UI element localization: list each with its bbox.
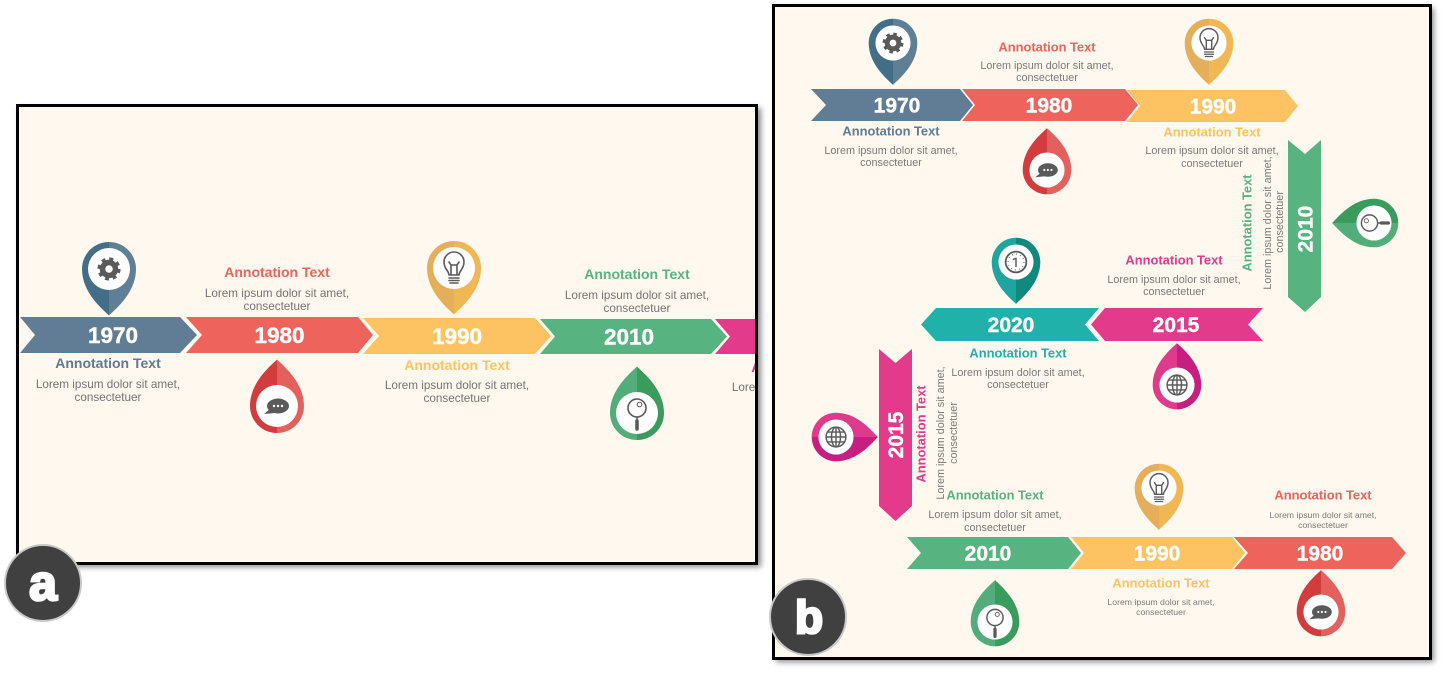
arrow 2015 <box>1091 308 1263 341</box>
annotation 1970: Annotation Text <box>842 124 940 138</box>
year 2020: 2020 <box>988 314 1034 337</box>
year 1990: 1990 <box>432 324 482 349</box>
year 2015: 2015 <box>885 411 908 458</box>
step 2010 <box>540 266 727 440</box>
annotation 2015: Lorem ipsum dolor sit amet, <box>732 381 876 394</box>
annotation 1980: Annotation Text <box>998 40 1096 54</box>
annotation 1990: Annotation Text <box>1163 124 1261 140</box>
step 1980 <box>186 264 373 433</box>
annotation 1990 <box>1107 576 1215 617</box>
arrow 1990 <box>1071 537 1245 569</box>
badge a: a <box>29 555 58 611</box>
annotation 1990: Annotation Text <box>404 357 510 373</box>
panel b frame <box>774 6 1434 662</box>
annotation 2020: consectetuer <box>987 379 1049 391</box>
annotation 2010 vertical: Annotation Text <box>1240 174 1254 272</box>
annotation 2015: consectetuer <box>771 394 838 407</box>
arrow 2020 <box>921 308 1099 341</box>
annotation 1990 <box>386 360 528 402</box>
annotation 1970: Annotation Text <box>55 355 161 371</box>
step 2020 <box>921 238 1099 391</box>
annotation 2020 <box>951 346 1085 391</box>
annotation 1970 <box>824 124 958 169</box>
pin: chat icon <box>1023 128 1071 194</box>
step 2010 bottom <box>907 488 1081 646</box>
annotation 1980: consectetuer <box>1016 72 1078 84</box>
annotation 2010: Annotation Text <box>946 488 1044 502</box>
pin: light bulb icon <box>1185 19 1233 85</box>
annotation 1980 <box>980 40 1114 84</box>
step 2015 vertical <box>812 349 960 521</box>
annotation 1970: consectetuer <box>860 157 922 169</box>
step 1990 bottom <box>1071 464 1245 617</box>
pin: globe icon <box>812 413 878 461</box>
annotation 1970: Lorem ipsum dolor sit amet, <box>824 145 958 157</box>
step 1970 <box>20 242 197 404</box>
annotation 1990: Annotation Text <box>1112 576 1210 590</box>
badge b: b <box>795 591 823 643</box>
pin: clock icon <box>992 238 1040 304</box>
annotation 2010 vertical <box>1240 156 1286 290</box>
annotation 2010 vertical: Lorem ipsum dolor sit amet, <box>1262 156 1274 290</box>
year 2010: 2010 <box>1294 206 1318 252</box>
annotation 1990: consectetuer <box>1136 607 1186 617</box>
arrow 2010 <box>907 537 1081 569</box>
pin: magnifier icon <box>610 366 664 440</box>
step 2015 clipped at frame edge <box>715 319 755 391</box>
annotation 1990: Lorem ipsum dolor sit amet, <box>385 379 529 392</box>
annotation 2015 vertical: Annotation Text <box>914 385 928 483</box>
pin: globe icon <box>1153 343 1201 409</box>
arrow 1990 <box>1127 90 1298 122</box>
annotation 1990: Lorem ipsum dolor sit amet, <box>1145 145 1279 157</box>
year 1980: 1980 <box>1297 542 1343 566</box>
step 1990 <box>363 241 551 405</box>
annotation 2010: consectetuer <box>964 522 1026 534</box>
panel a: horizontal timeline <box>16 104 765 571</box>
annotation 1980 <box>1269 488 1377 530</box>
pin: gear icon <box>82 242 136 316</box>
annotation 2015: Lorem ipsum dolor sit amet, <box>1107 274 1241 286</box>
step 1980 <box>962 40 1138 194</box>
panel a timeline steps <box>20 241 755 440</box>
step 2010 vertical <box>1240 140 1398 312</box>
annotation 1980: Annotation Text <box>224 264 330 280</box>
arrow 1980 <box>186 317 373 353</box>
arrow 1970 <box>811 89 973 121</box>
annotation 2015: consectetuer <box>1143 286 1205 298</box>
annotation 1980: Lorem ipsum dolor sit amet, <box>980 60 1114 72</box>
year 1990: 1990 <box>1190 96 1236 118</box>
annotation 2020: Annotation Text <box>969 346 1067 360</box>
step 2015 horizontal <box>1091 252 1263 409</box>
panel a frame <box>18 106 761 567</box>
pin: light bulb icon <box>427 241 481 314</box>
pin: chat icon <box>1297 570 1345 636</box>
step 1970 <box>811 19 973 169</box>
annotation 1990: consectetuer <box>1181 158 1243 170</box>
badge b <box>770 579 846 655</box>
annotation 2015 <box>1107 252 1241 298</box>
annotation 1980: consectetuer <box>1298 520 1348 530</box>
annotation 2015 vertical: consectetuer <box>948 402 960 464</box>
year 2010: 2010 <box>604 324 654 350</box>
arrow 1980 <box>1234 537 1406 569</box>
annotation 1970: consectetuer <box>75 391 142 404</box>
year 1990: 1990 <box>1134 542 1180 566</box>
pin: light bulb icon <box>1135 464 1183 530</box>
annotation 2010: Annotation Text <box>584 266 690 282</box>
pin: magnifier icon <box>971 580 1019 646</box>
pin: gear icon <box>869 19 917 85</box>
annotation 2015 <box>732 363 755 391</box>
panel b: serpentine timeline <box>774 6 1434 662</box>
arrow 1980 <box>962 89 1138 121</box>
annotation 2010: Lorem ipsum dolor sit amet, <box>565 289 709 302</box>
annotation 1980: Lorem ipsum dolor sit amet, <box>205 287 349 300</box>
annotation 1970: Lorem ipsum dolor sit amet, <box>36 378 180 391</box>
annotation 1980: consectetuer <box>244 300 311 313</box>
annotation 1970 <box>36 358 180 401</box>
annotation 2015: Annotation Text <box>751 359 857 375</box>
annotation 2010 vertical: consectetuer <box>1274 191 1286 253</box>
annotation 2010: Lorem ipsum dolor sit amet, <box>928 509 1062 521</box>
step 1980 bottom <box>1234 488 1406 636</box>
annotation 1980 <box>206 267 348 310</box>
annotation 1980: Annotation Text <box>1274 488 1372 502</box>
annotation 2015 vertical: Lorem ipsum dolor sit amet, <box>935 366 947 500</box>
badge a <box>5 545 81 621</box>
arrow 2010 <box>540 319 727 354</box>
year 2015: 2015 <box>1153 314 1200 337</box>
arrow 2010 vertical <box>1288 140 1321 312</box>
pin: chat icon <box>250 360 304 433</box>
arrow 2015 <box>715 319 755 354</box>
annotation 2010 <box>928 488 1062 534</box>
pin: magnifier icon <box>1332 199 1398 247</box>
year 2010: 2010 <box>965 542 1011 566</box>
year 1970: 1970 <box>88 323 138 348</box>
annotation 2015: Annotation Text <box>1125 252 1223 268</box>
arrow 1990 <box>363 318 551 354</box>
annotation 2010: consectetuer <box>604 302 671 315</box>
arrow 1970 <box>20 317 197 353</box>
annotation 2015 vertical <box>914 366 960 500</box>
year 1970: 1970 <box>874 94 920 118</box>
year 1980: 1980 <box>1026 94 1072 118</box>
arrow 2015 vertical <box>879 349 912 521</box>
step 1990 <box>1127 19 1298 170</box>
annotation 1990: Lorem ipsum dolor sit amet, <box>1107 597 1215 607</box>
annotation 1990: consectetuer <box>424 392 491 405</box>
annotation 2020: Lorem ipsum dolor sit amet, <box>951 367 1085 379</box>
year 1980: 1980 <box>254 323 305 348</box>
annotation 2010 <box>566 269 708 312</box>
annotation 1990 <box>1145 124 1279 170</box>
annotation 1980: Lorem ipsum dolor sit amet, <box>1269 510 1377 520</box>
